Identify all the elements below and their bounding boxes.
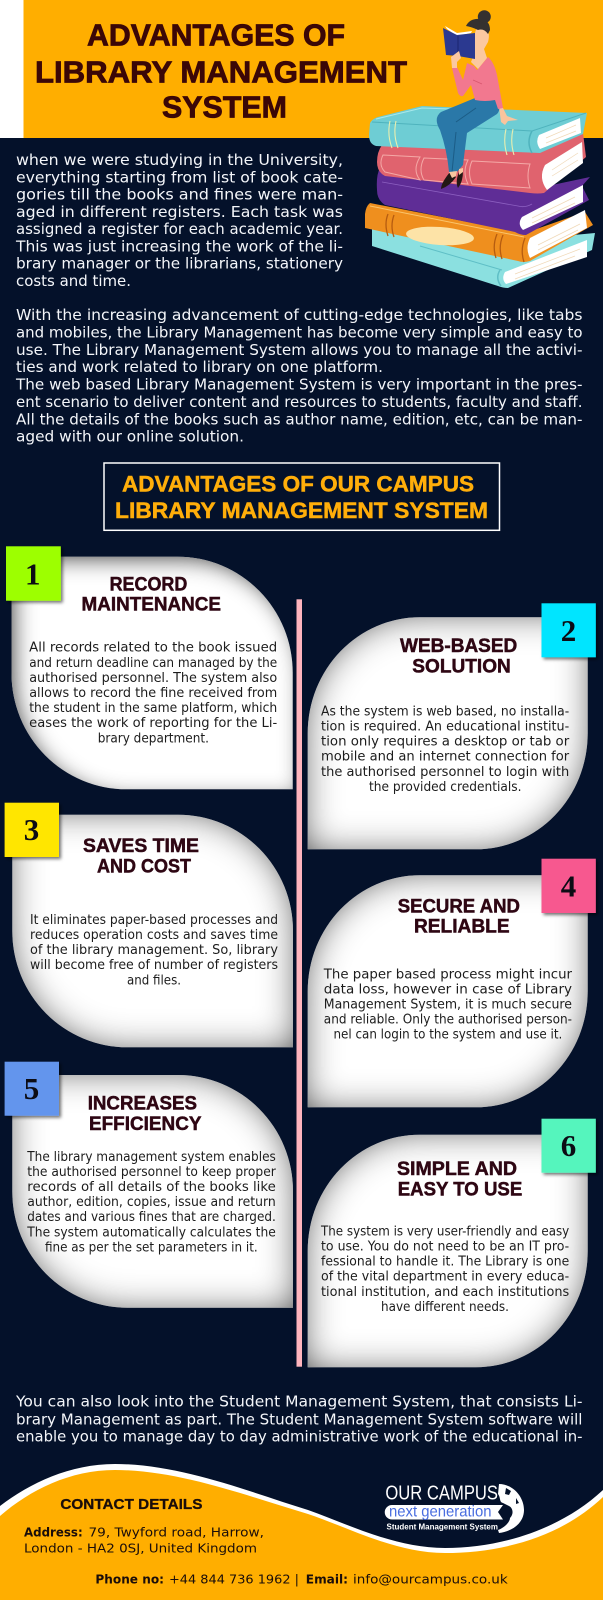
hand xyxy=(451,51,461,68)
intro paragraph 1: brary manager or the librarians, stationery xyxy=(16,255,343,273)
woman reading xyxy=(437,10,518,189)
body text xyxy=(30,913,278,988)
closing paragraph: brary Management as part. The Student Management System software will xyxy=(16,1410,582,1428)
badge 4 xyxy=(542,859,596,913)
body text: mobile and an internet connection for xyxy=(321,750,570,765)
body text: the authorised personnel to login with xyxy=(321,765,569,780)
body text xyxy=(321,704,570,795)
body text: All records related to the book issued xyxy=(29,641,277,656)
body text: fessional to handle it. The Library is one xyxy=(321,1255,569,1270)
body text: authorised personnel. The system also xyxy=(29,671,277,686)
panel: 6 simple and easy to use xyxy=(308,1119,596,1367)
intro paragraph 2: use. The Library Management System allows you to manage all the activi- xyxy=(16,341,582,359)
contact heading: CONTACT DETAILS xyxy=(60,1497,203,1513)
heading: MAINTENANCE xyxy=(82,593,221,615)
heading xyxy=(82,574,221,615)
body text: of the library management. So, library xyxy=(30,943,278,958)
book: teal top xyxy=(369,106,587,155)
book: aqua bottom xyxy=(372,228,595,288)
closing paragraph xyxy=(15,1393,583,1446)
body text: It eliminates paper-based processes and xyxy=(30,913,278,928)
book: purple xyxy=(377,168,590,235)
body text: of the vital department in every educa- xyxy=(321,1270,570,1285)
illustration: stack of books with reading woman xyxy=(365,10,595,288)
body text: the student in the same platform, which xyxy=(29,701,277,716)
intro paragraph 1: when we were studying in the University, xyxy=(16,151,343,169)
body text: dates and various fines that are charged. xyxy=(27,1210,276,1225)
next generation pill: next generation xyxy=(389,1504,492,1521)
book: red xyxy=(377,133,586,194)
shoes xyxy=(441,171,463,189)
intro paragraph 1 xyxy=(15,151,343,290)
body text: and return deadline can managed by the xyxy=(29,656,277,671)
intro paragraph 1: aged in different registers. Each task was xyxy=(16,203,343,221)
body text: to use. You do not need to be an IT pro- xyxy=(321,1239,570,1254)
hair xyxy=(466,19,490,34)
heading: RECORD xyxy=(110,574,187,596)
badge 2 xyxy=(542,603,596,657)
badge 3 xyxy=(5,803,59,857)
badge 2: 2 xyxy=(561,613,576,648)
section heading box: ADVANTAGES OF OUR CAMPUS xyxy=(122,472,474,497)
body text: tional institution, and each institutions xyxy=(321,1285,569,1300)
closing paragraph: You can also look into the Student Management System, that consists Li- xyxy=(15,1393,583,1411)
body text: tion only requires a desktop or tab or xyxy=(321,735,570,750)
body text: brary department. xyxy=(98,731,209,746)
body text: will become free of number of registers xyxy=(30,958,278,973)
body text: reduces operation costs and saves time xyxy=(30,928,278,943)
intro paragraph 2: The web based Library Management System is very important in the pres- xyxy=(15,376,583,394)
phone and email: Email: xyxy=(306,1572,348,1587)
address xyxy=(24,1526,264,1556)
heading: RELIABLE xyxy=(414,916,510,938)
heading: SECURE AND xyxy=(398,895,520,917)
panel: 1 record maintenance xyxy=(6,546,293,789)
section heading box xyxy=(104,463,500,530)
arm on book xyxy=(499,107,518,125)
sweater xyxy=(452,57,503,109)
contact details xyxy=(24,1497,508,1587)
phone and email xyxy=(95,1572,508,1587)
badge 1 xyxy=(6,546,61,601)
intro paragraph 1: gories till the books and fines were man- xyxy=(16,186,343,204)
body text xyxy=(320,1224,570,1315)
body text: data loss, however in case of Library xyxy=(324,982,572,997)
intro paragraph 2: aged with our online solution. xyxy=(16,428,244,446)
logo: our campus: Student Management System xyxy=(386,1521,498,1531)
body text: records of all details of the books like xyxy=(27,1180,276,1195)
book cover oval xyxy=(405,225,475,247)
body text: The library management system enables xyxy=(26,1150,276,1165)
closing paragraph: enable you to manage day to day administrative work of the educational in- xyxy=(16,1428,582,1446)
intro paragraph 2 xyxy=(15,306,583,446)
intro paragraph 2: All the details of the books such as author name, edition, etc, can be man- xyxy=(16,410,582,428)
phone and email: Phone no: xyxy=(95,1572,164,1587)
body text xyxy=(26,1150,276,1255)
intro paragraph 1: everything starting from list of book cate- xyxy=(16,168,343,186)
body text: allows to record the fine received from xyxy=(29,686,277,701)
intro paragraph 1: costs and time. xyxy=(16,272,131,290)
heading: SIMPLE AND xyxy=(397,1158,517,1180)
book held xyxy=(445,26,472,36)
body text: the provided credentials. xyxy=(369,780,522,795)
jeans xyxy=(437,98,500,172)
vertical divider xyxy=(296,599,302,1367)
panel: 3 saves time and cost xyxy=(5,803,293,1047)
logo: our campus: OUR CAMPUS xyxy=(385,1482,498,1504)
icon: globe xyxy=(498,1484,524,1533)
intro paragraph 1: This was just increasing the work of the li- xyxy=(15,237,343,255)
heading xyxy=(398,895,520,938)
title: LIBRARY MANAGEMENT xyxy=(35,54,407,90)
badge 6 xyxy=(542,1119,596,1173)
body text: author, edition, copies, issue and return xyxy=(27,1195,276,1210)
badge 5: 5 xyxy=(24,1071,39,1106)
heading: WEB-BASED xyxy=(400,635,517,657)
heading: INCREASES xyxy=(88,1092,197,1114)
title: ADVANTAGES OF xyxy=(87,18,345,52)
body text: The system is very user-friendly and easy xyxy=(320,1224,570,1239)
footer wave xyxy=(0,1464,603,1600)
badge 5 xyxy=(5,1062,59,1116)
title: SYSTEM xyxy=(162,90,287,124)
header band xyxy=(0,0,603,138)
phone and email: info@ourcampus.co.uk xyxy=(353,1572,508,1587)
intro paragraph 2: ties and work related to library on one platform. xyxy=(16,358,383,376)
heading xyxy=(83,835,199,877)
heading: EASY TO USE xyxy=(398,1178,522,1200)
badge 1: 1 xyxy=(25,556,40,591)
intro paragraph 2: and mobiles, the Library Management has become very simple and easy to xyxy=(16,323,582,341)
body text: nel can login to the system and use it. xyxy=(334,1027,562,1042)
heading: EFFICIENCY xyxy=(89,1113,202,1135)
intro paragraph 1: assigned a register for each academic year. xyxy=(16,220,343,238)
body text xyxy=(323,967,573,1042)
badge 3: 3 xyxy=(24,812,39,847)
body text: The paper based process might incur xyxy=(323,967,573,982)
body text: the authorised personnel to keep proper xyxy=(27,1165,276,1180)
intro paragraph 2: With the increasing advancement of cutting-edge technologies, like tabs xyxy=(16,306,583,324)
heading xyxy=(400,635,517,678)
body text: Management System, it is much secure xyxy=(324,997,572,1012)
phone and email: +44 844 736 1962 | xyxy=(169,1572,299,1587)
badge 6: 6 xyxy=(561,1128,576,1163)
body text xyxy=(29,641,278,746)
address: 79, Twyford road, Harrow, xyxy=(88,1526,264,1541)
address: Address: xyxy=(24,1526,83,1541)
title xyxy=(35,18,407,124)
body text: As the system is web based, no installa- xyxy=(321,704,570,719)
heading: SAVES TIME xyxy=(83,835,199,857)
address: London - HA2 0SJ, United Kingdom xyxy=(24,1541,257,1556)
body text: and reliable. Only the authorised person- xyxy=(324,1012,572,1027)
badge 4: 4 xyxy=(561,869,576,904)
heading: SOLUTION xyxy=(412,656,511,678)
logo: our campus xyxy=(385,1482,524,1533)
heading xyxy=(88,1092,202,1135)
panel: 4 secure and reliable xyxy=(308,859,596,1107)
body text: have different needs. xyxy=(381,1300,509,1315)
book: orange xyxy=(365,203,593,262)
body text: tion is required. An educational institu- xyxy=(321,719,570,734)
section heading box: LIBRARY MANAGEMENT SYSTEM xyxy=(115,498,488,523)
body text: fine as per the set parameters in it. xyxy=(45,1240,258,1255)
body text: and files. xyxy=(127,973,181,988)
neck and face xyxy=(471,28,489,69)
panel: 5 increases efficiency xyxy=(5,1062,293,1308)
heading xyxy=(397,1158,522,1200)
intro paragraph 2: ent scenario to deliver content and resources to students, faculty and staff. xyxy=(16,393,582,411)
body text: eases the work of reporting for the Li- xyxy=(29,716,278,731)
heading: AND COST xyxy=(97,855,191,877)
body text: The system automatically calculates the xyxy=(26,1225,276,1240)
panel: 2 web-based solution xyxy=(308,603,596,849)
